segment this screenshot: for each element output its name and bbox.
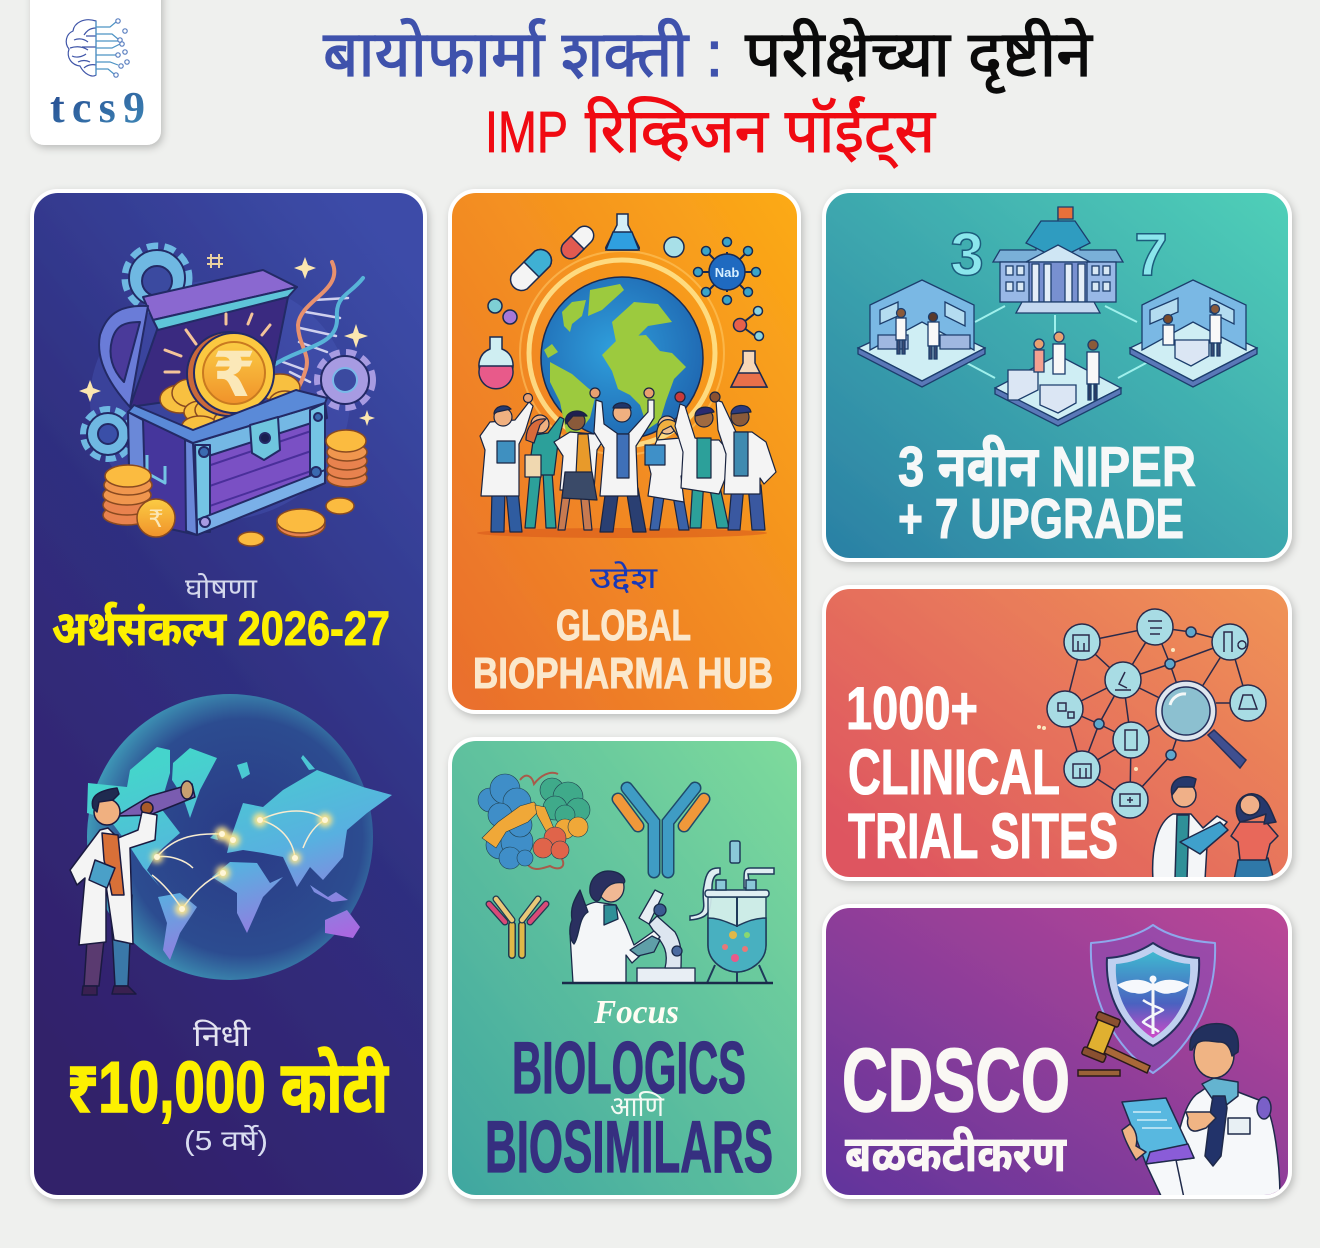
panel: CDSCO xyxy=(824,906,1290,1200)
heading: CDSCO: CDSCO xyxy=(842,1031,1070,1131)
logo wordmark: tcs9 xyxy=(50,83,145,132)
heading: budget: अर्थसंकल्प 2026-27 xyxy=(52,601,390,656)
title line 2 red: रिव्हिजन पॉईंट्स xyxy=(585,96,936,169)
numerals 3 and 7: 3 xyxy=(950,221,984,288)
title line 1 blue: बायोफार्मा शक्ती : xyxy=(323,18,723,90)
panel: budget and fund xyxy=(32,191,425,1197)
heading: biopharma hub: BIOPHARMA HUB xyxy=(473,649,773,698)
heading: +7 upgrade: + 7 UPGRADE xyxy=(898,487,1184,551)
panel: biologics and biosimilars xyxy=(450,739,799,1197)
capsule xyxy=(511,226,594,290)
center lab room xyxy=(995,332,1121,426)
panel: global biopharma hub xyxy=(450,191,799,712)
small molecule right xyxy=(734,306,764,340)
heading: clinical: CLINICAL xyxy=(848,736,1060,808)
title xyxy=(323,18,1093,169)
doctor with tablet xyxy=(1122,1024,1280,1200)
label: announcement: घोषणा xyxy=(185,572,258,604)
ground shadow xyxy=(477,528,767,538)
scientist with microscope xyxy=(562,871,773,983)
icon: large antibody xyxy=(618,788,704,872)
doctor xyxy=(1153,777,1228,880)
person 5 xyxy=(645,416,693,530)
left lab room xyxy=(858,280,985,387)
coin stacks xyxy=(103,430,367,546)
icon: institute building xyxy=(993,207,1123,313)
panel: clinical trial sites xyxy=(824,587,1290,880)
glow points xyxy=(151,813,332,916)
person 1 xyxy=(480,394,533,532)
heading: strengthening: बळकटीकरण xyxy=(845,1126,1067,1182)
title line 2 IMP: IMP xyxy=(485,100,568,165)
icon: shield with caduceus xyxy=(1091,925,1215,1073)
label: fund: निधी xyxy=(193,1019,251,1053)
figure: 10,000 crore: ₹10,000 कोटी xyxy=(67,1047,389,1128)
label: focus: Focus xyxy=(593,994,679,1031)
continents xyxy=(87,747,392,960)
Nab molecule xyxy=(694,238,760,304)
decorative sparkles beside network xyxy=(1037,648,1175,771)
chest lid xyxy=(130,297,288,407)
title line 1 black: परीक्षेच्या दृष्टीने xyxy=(745,18,1093,94)
gears xyxy=(84,247,372,458)
big rupee coin: ₹ xyxy=(212,338,256,411)
person 6 xyxy=(675,392,729,528)
label: and: आणि xyxy=(610,1090,665,1122)
panel: NIPER xyxy=(824,191,1290,560)
icon: gavel xyxy=(1078,1011,1150,1076)
numerals 3 and 7 xyxy=(950,221,1168,288)
heading: biologics: BIOLOGICS xyxy=(512,1028,746,1109)
icons: capsules, flasks, molecules xyxy=(479,214,767,389)
network of research nodes xyxy=(1047,609,1266,818)
illustration: global map with scientist xyxy=(70,694,392,995)
person 2 xyxy=(525,415,564,528)
flask top xyxy=(606,214,639,250)
flask right xyxy=(731,351,767,387)
person 7 xyxy=(710,392,776,530)
scientist with telescope xyxy=(70,781,195,995)
illustration: protein structure xyxy=(478,773,590,869)
icon: magnifying glass xyxy=(1156,681,1246,768)
numerals 3 and 7: 7 xyxy=(1134,221,1168,288)
heading: biosimilars: BIOSIMILARS xyxy=(485,1107,773,1188)
icon: treasure chest with coins xyxy=(79,247,375,546)
person 3 xyxy=(554,411,609,530)
right lab room xyxy=(1130,280,1257,387)
coins in chest xyxy=(160,374,301,436)
icon: bioreactor xyxy=(690,841,774,983)
coin stacks: ₹ xyxy=(148,505,164,533)
label: 5 years: (5 वर्षे) xyxy=(184,1124,268,1156)
figure: 1000+: 1000+ xyxy=(846,675,978,742)
label: objective: उद्देश xyxy=(590,560,658,595)
group of cheering scientists xyxy=(480,388,776,532)
heading: 3 new NIPER: 3 नवीन NIPER xyxy=(898,434,1196,499)
patient xyxy=(1231,794,1278,880)
dna helix xyxy=(272,262,363,392)
text inside Nab molecule: Nab xyxy=(715,265,739,280)
land masses xyxy=(544,284,686,436)
heading: global: GLOBAL xyxy=(556,601,691,650)
big rupee coin xyxy=(187,332,274,416)
flask left xyxy=(479,337,513,382)
heading: trial sites: TRIAL SITES xyxy=(848,800,1118,872)
sparkles xyxy=(79,257,375,426)
person 4 center xyxy=(590,388,654,532)
chest body xyxy=(128,412,197,535)
icon: circuit brain xyxy=(66,19,129,77)
route arcs xyxy=(152,811,325,909)
logo card xyxy=(30,0,161,145)
icon: small antibody xyxy=(489,899,546,955)
rays xyxy=(165,314,270,372)
illustration: globe xyxy=(520,251,724,455)
connector lines xyxy=(965,306,1148,378)
